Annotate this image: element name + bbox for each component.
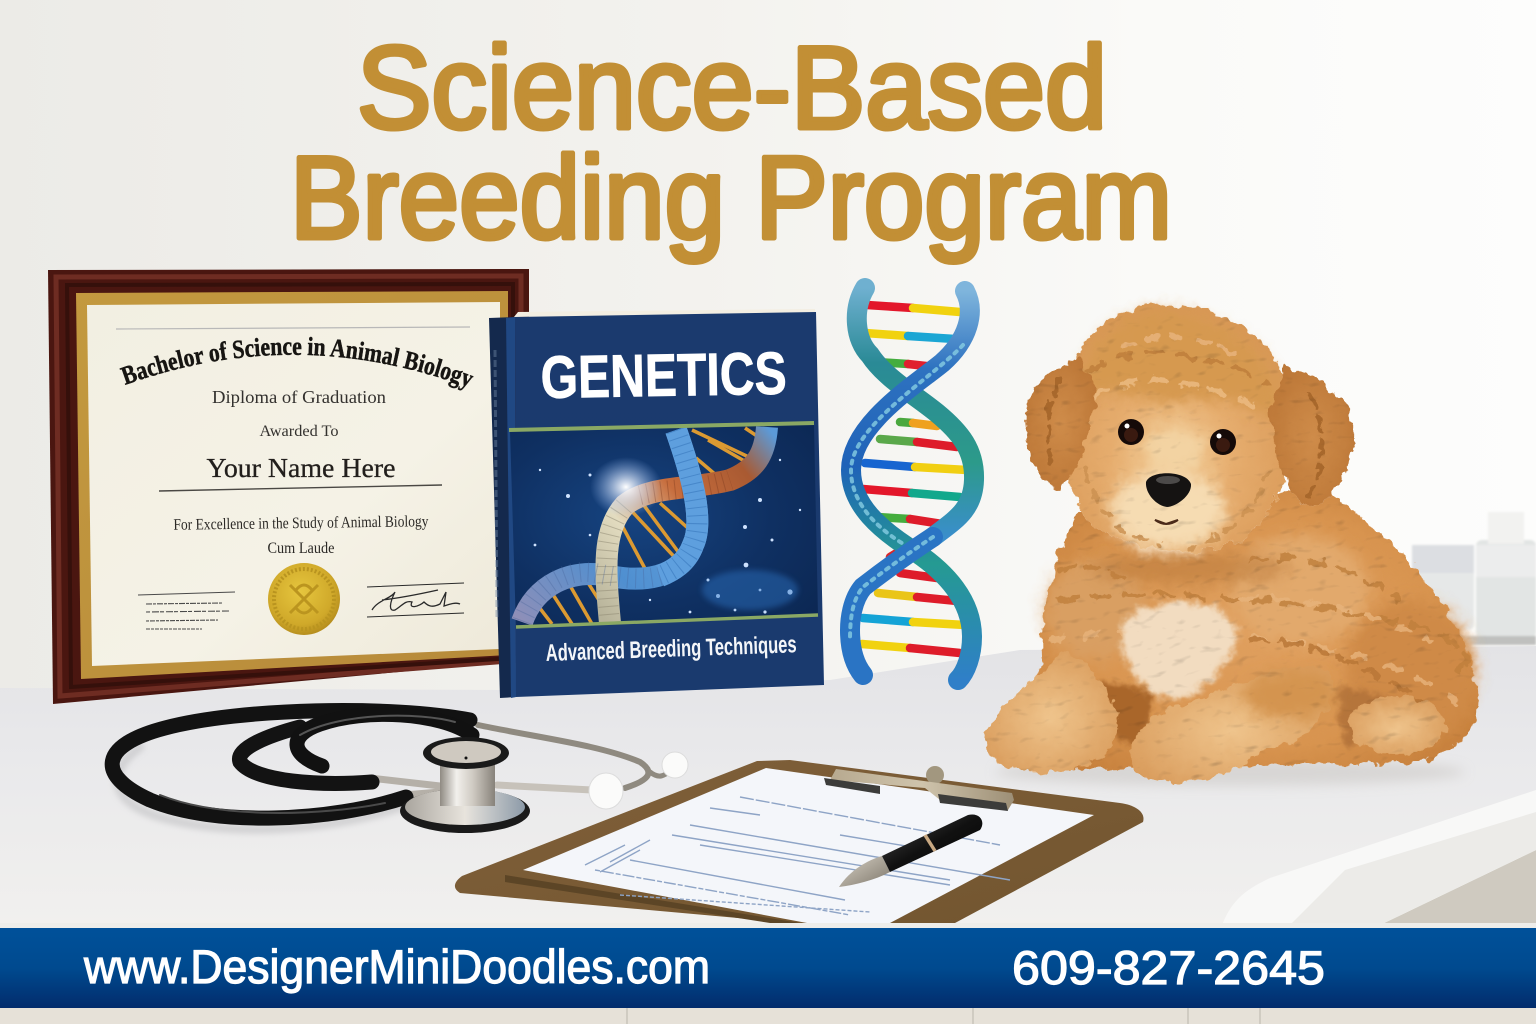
shadow [117,747,406,829]
eye left [1118,419,1144,445]
diploma heading [125,355,470,388]
table shadow under puppy [995,758,1465,786]
diploma subtitle: Diploma of Graduation [212,387,386,407]
paper [523,768,1094,923]
chest piece base [400,789,530,833]
puppy face [1118,419,1236,524]
signature [367,583,464,617]
clip [824,766,1014,811]
chest piece stem [440,760,495,806]
table cloth fold [1222,790,1536,925]
title: Science-Based [357,22,1107,153]
stethoscope [112,711,688,833]
upper tube [297,714,472,766]
floor cabinet strip [0,1008,1536,1024]
green rules [509,423,814,430]
ear right [1270,365,1355,510]
website: www.DesignerMiniDoodles.com [83,940,710,993]
furry head [1025,305,1355,551]
sparkle [590,457,662,517]
rear strand upper [857,288,974,537]
book title: GENETICS [540,340,787,411]
base pair rungs [862,305,967,653]
form lines [585,797,1010,915]
title: Breeding Program [290,132,1172,263]
genetics book [489,309,824,698]
gold seal [268,563,340,635]
front strand two [850,537,933,675]
book helix illustration [522,427,767,624]
recipient name: Your Name Here [206,453,396,483]
page top edge [514,309,815,317]
title [290,22,1172,263]
spine [489,317,516,698]
clipboard [455,760,1143,923]
puppy [984,305,1478,786]
diploma paper [87,302,500,666]
hind paw [1349,696,1445,754]
head tufts [1085,337,1270,548]
footer band [0,928,1536,1008]
background wall [0,0,1536,700]
toy dna model [850,288,974,680]
front strand one [851,291,972,680]
gold mat [76,291,508,679]
nose [1146,473,1191,507]
cover [515,312,824,697]
fur tufts [1050,558,1465,720]
ear left [1025,358,1096,486]
fine print [138,592,235,629]
eye right [1210,429,1236,455]
metal tubes [478,725,648,788]
board [455,760,1143,923]
inner tube [240,727,372,783]
mouth [1155,520,1178,524]
blurred jars on the right [1410,512,1536,645]
chest patch [1122,602,1236,700]
diploma frame [48,269,529,704]
frame moulding [48,269,529,704]
diploma frame: Bachelor of Science in Animal Biology [120,336,474,390]
neck shadow [1090,552,1290,584]
table top [0,646,1536,925]
furry body [984,490,1478,783]
cum laude: Cum Laude [268,540,335,557]
white strip above footer [0,923,1536,928]
pen [839,814,982,887]
excellence line: For Excellence in the Study of Animal Biology [173,513,429,534]
cabinet below the table corner [1380,850,1536,925]
space panel [510,424,818,628]
left foreleg [984,650,1118,772]
chest piece ring [423,737,509,769]
front foreleg [1130,666,1332,783]
strand beads [851,345,963,545]
book subtitle: Advanced Breeding Techniques [545,631,797,667]
phone number: 609-827-2645 [1012,941,1325,994]
ear tips [589,773,623,809]
long tube [112,711,470,818]
head [1064,305,1290,551]
stars [534,459,801,614]
awarded to: Awarded To [260,423,339,440]
